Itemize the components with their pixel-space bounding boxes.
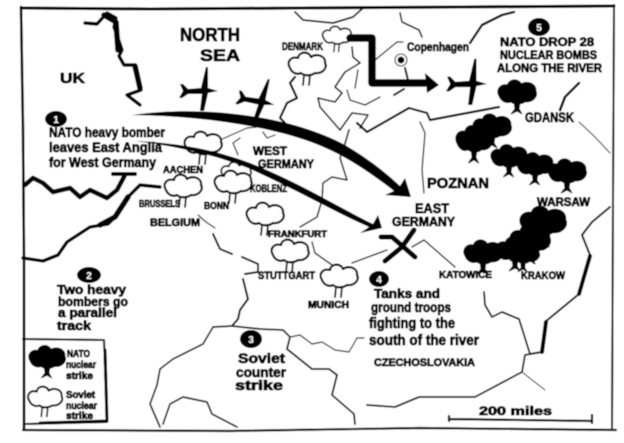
callout 1: NATO bomber leaves: 1: [53, 115, 59, 126]
callout 2: two heavy bombers: bombers go: [58, 294, 128, 309]
legend: NATO nuclear strike: strike: [66, 371, 93, 382]
legend: NATO nuclear strike: [29, 346, 96, 382]
callout 4: tanks and ground troops: ground troops: [371, 299, 451, 315]
map labels: KRAKOW: [521, 270, 566, 282]
callout 3: Soviet counter strike: counter: [236, 364, 287, 380]
callout 3: Soviet counter strike: 3: [248, 335, 254, 346]
callout 2: two heavy bombers: track: [57, 318, 92, 333]
icon: Copenhagen marker: [395, 54, 408, 80]
callout 4: tanks and ground troops: 4: [376, 275, 382, 286]
legend: Soviet nuclear strike: strike: [66, 411, 93, 422]
icon: crossed-out plane: [381, 230, 415, 261]
callout 2: two heavy bombers: 2: [86, 271, 92, 282]
legend: NATO nuclear strike: nuclear: [66, 360, 96, 371]
map labels: GERMANY: [392, 214, 455, 229]
map labels: WEST: [253, 144, 288, 158]
scale bar: 200 miles: 200 miles: [479, 404, 552, 418]
map labels: BRUSSELS: [139, 199, 180, 210]
callout 5: NATO drop bombs along river: NUCLEAR BOMBS: [500, 48, 597, 62]
scale bar: 200 miles: [449, 404, 592, 423]
callout 1: NATO bomber leaves: for West Germany: [49, 154, 156, 170]
icon: bomber plane 1: [179, 67, 218, 111]
callout 4: tanks and ground troops: [369, 271, 479, 349]
callout 5: NATO drop bombs along river: ALONG THE RIVER: [497, 61, 602, 75]
callout 2: two heavy bombers: Two heavy: [57, 282, 127, 297]
map labels: AACHEN: [163, 165, 203, 176]
map labels: WARSAW: [537, 195, 591, 209]
legend: Soviet nuclear strike: [28, 387, 97, 422]
callout 2: two heavy bombers: a parallel: [58, 305, 117, 320]
callout 3: Soviet counter strike: [235, 330, 287, 393]
map labels: BELGIUM: [150, 217, 200, 229]
callout 3: Soviet counter strike: strike: [235, 377, 283, 393]
map labels: MUNICH: [308, 300, 349, 311]
map labels: POZNAN: [427, 175, 489, 192]
map labels: BONN: [204, 201, 229, 212]
icon: bomber plane 3: [446, 59, 487, 105]
callout 5: NATO drop bombs along river: NATO DROP 28: [500, 35, 594, 49]
map labels: SEA: [200, 46, 240, 65]
map labels: CZECHOSLOVAKIA: [374, 357, 475, 369]
map labels: STUTTGART: [258, 270, 315, 282]
map labels: NORTH: [180, 25, 240, 45]
callout 4: tanks and ground troops: south of the river: [369, 332, 479, 349]
map labels: GDANSK: [525, 109, 574, 125]
icon: bomber plane 2: [232, 73, 280, 125]
filled mushroom clouds: NATO strikes: [456, 81, 586, 274]
map labels: KATOWICE: [439, 270, 492, 281]
map labels: FRANKFURT: [268, 229, 328, 239]
callout 4: tanks and ground troops: Tanks and: [374, 286, 440, 301]
open mushroom clouds: Soviet strikes: [165, 26, 358, 297]
map labels: Copenhagen: [407, 40, 469, 54]
map labels: [60, 25, 591, 369]
callout 4: tanks and ground troops: fighting to the: [369, 315, 455, 332]
callout 1: NATO bomber leaves: NATO heavy bomber: [49, 124, 165, 140]
map labels: EAST: [415, 200, 449, 216]
callout 3: Soviet counter strike: Soviet: [238, 350, 285, 366]
legend: Soviet nuclear strike: nuclear: [66, 401, 97, 412]
callout 1: NATO bomber leaves: [45, 111, 165, 170]
map labels: GERMANY: [258, 157, 314, 171]
map labels: DENMARK: [282, 41, 323, 53]
arrow: parallel bomber route: [135, 141, 382, 233]
callout 5: NATO drop bombs along river: 5: [536, 23, 542, 34]
legend: NATO nuclear strike: NATO: [67, 349, 90, 360]
legend: Soviet nuclear strike: Soviet: [66, 390, 96, 401]
map labels: UK: [60, 70, 85, 87]
arrow: angular route from Denmark: [350, 38, 439, 93]
callout 1: NATO bomber leaves: leaves East Anglia: [49, 139, 162, 155]
callout 5: NATO drop bombs along river: [497, 18, 602, 75]
arrow: main bomber route to East Germany: [132, 111, 411, 197]
callout 2: two heavy bombers: [57, 267, 128, 333]
legend: [23, 339, 107, 424]
map labels: KOBLENZ: [250, 183, 287, 195]
